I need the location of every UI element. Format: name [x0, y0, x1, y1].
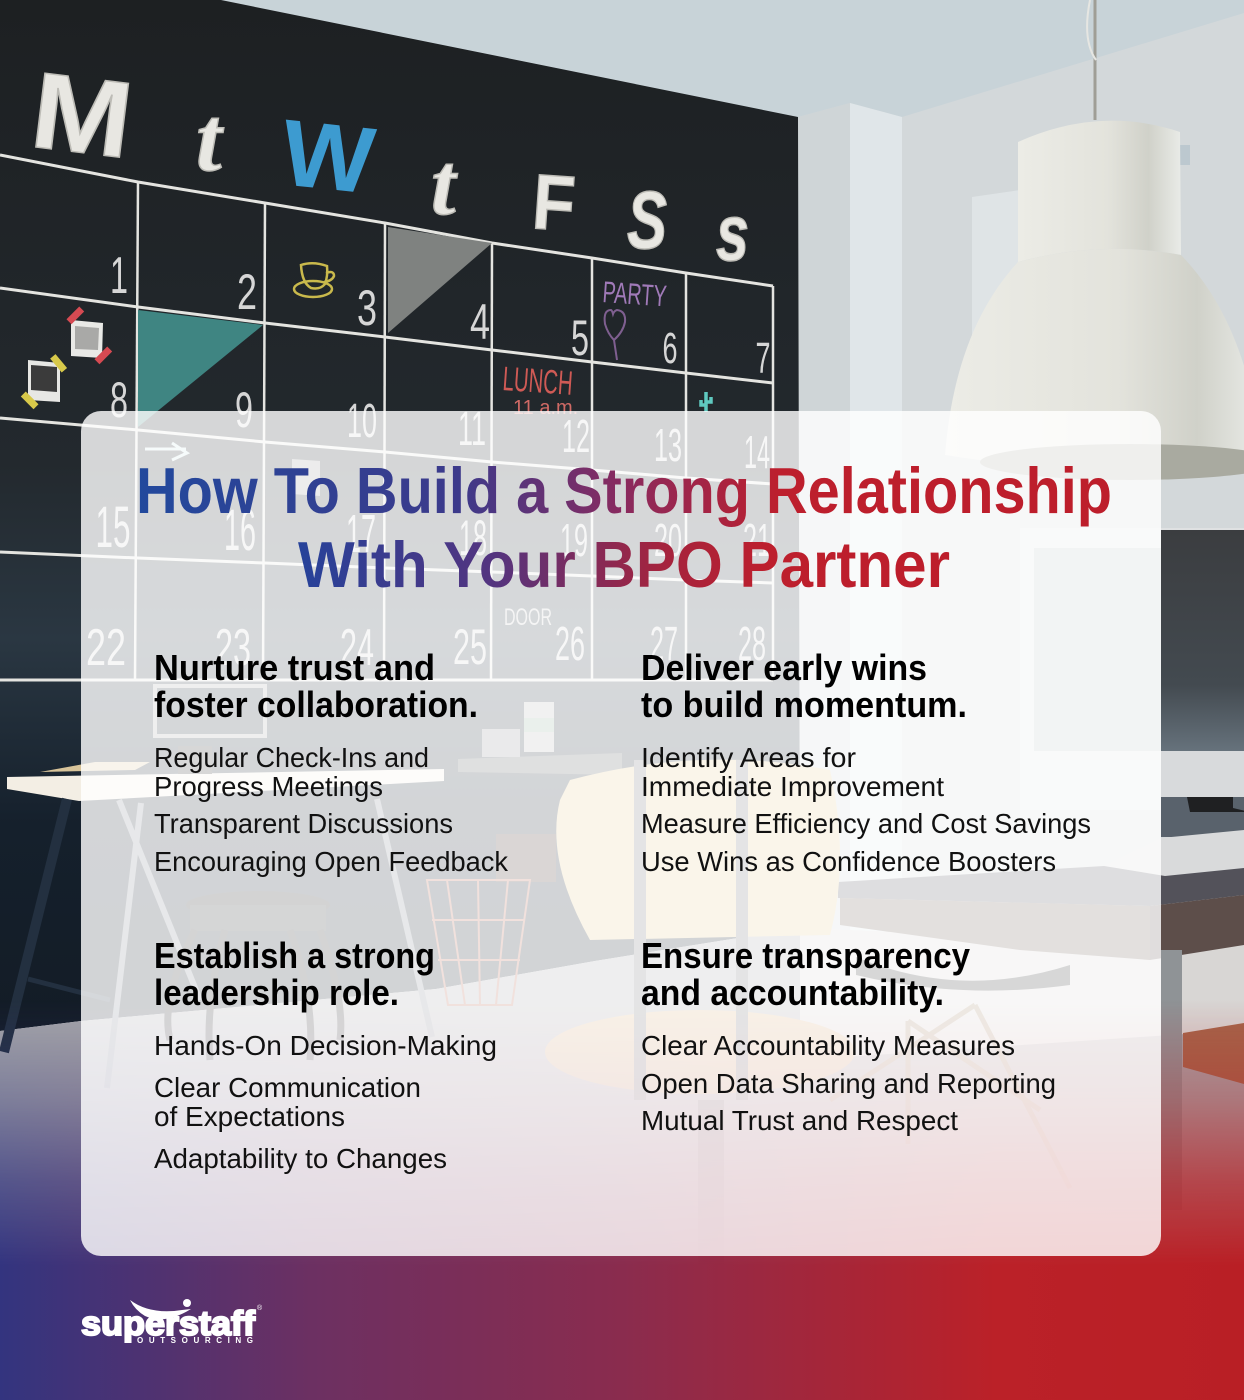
list: nurture trust items: Regular Check-Ins and	[154, 742, 429, 773]
list: early wins items: Use Wins as Confidence Boosters	[641, 846, 1056, 877]
heading: early wins	[641, 647, 967, 725]
chalk text: open door: DOOR	[504, 604, 552, 631]
list: early wins items	[641, 742, 1091, 877]
heading: nurture trust: Nurture trust and	[154, 647, 435, 688]
list: nurture trust items: Encouraging Open Feedback	[154, 846, 509, 877]
heading: early wins: to build momentum.	[641, 684, 967, 725]
section: early wins	[641, 647, 1091, 877]
logo tagline: OUTSOURCING	[137, 1336, 253, 1345]
logo wordmark: superstaff	[81, 1305, 256, 1343]
logo swoosh and figure	[130, 1299, 191, 1319]
chalk triangle: teal	[138, 310, 263, 427]
calendar day numbers: 10	[347, 395, 377, 448]
monitor	[1020, 528, 1244, 876]
list: early wins items: Immediate Improvement	[641, 771, 944, 802]
calendar day numbers: 27	[650, 618, 678, 671]
list: transparency items: Clear Accountability Measures	[641, 1030, 1015, 1061]
heading: nurture trust: foster collaboration.	[154, 684, 478, 725]
calendar day numbers: 5	[571, 310, 589, 366]
right wall base	[800, 928, 1244, 1060]
calendar day numbers: 2	[237, 264, 257, 320]
calendar weekday letters: s	[716, 188, 749, 277]
list: leadership items: Hands-On Decision-Making	[154, 1030, 497, 1061]
heading: leadership role	[154, 935, 435, 1013]
heading: nurture trust	[154, 647, 478, 725]
calendar day numbers: 17	[346, 504, 376, 564]
chalk grid lines	[0, 155, 773, 680]
wooden chair	[545, 760, 855, 1290]
chalk drawing: arrow	[145, 443, 187, 460]
list: transparency items: Mutual Trust and Respect	[641, 1105, 958, 1136]
list: leadership items: of Expectations	[154, 1101, 345, 1132]
chalk drawing: balloons	[605, 310, 625, 360]
calendar day numbers: 21	[743, 514, 771, 566]
calendar day numbers: 3	[357, 280, 377, 336]
section: leadership role	[154, 935, 497, 1174]
left desk	[4, 746, 444, 1088]
white walls and column	[798, 13, 1244, 1100]
list: leadership items: Clear Communication	[154, 1072, 421, 1103]
calendar day numbers: 20	[654, 514, 682, 566]
heading: leadership role: Establish a strong	[154, 935, 435, 976]
laptop and plants on back desk	[155, 686, 622, 882]
calendar weekday letters: W	[277, 99, 380, 214]
chalk text: lunch: LUNCH	[501, 360, 574, 403]
calendar day numbers: 19	[560, 514, 588, 566]
metal stool	[168, 891, 341, 1060]
pinned photos	[21, 307, 320, 496]
wire basket	[427, 880, 530, 1005]
title: With Your BPO Partner	[298, 528, 950, 601]
calendar weekday letters: t	[196, 88, 224, 190]
calendar day numbers: 11	[458, 403, 486, 456]
calendar day numbers: 28	[738, 618, 766, 671]
heading: early wins: Deliver early wins	[641, 647, 927, 688]
calendar day numbers: 18	[459, 510, 487, 566]
bottom colour gradient overlay	[0, 980, 1244, 1400]
pendant lamp	[945, 0, 1244, 480]
calendar weekday letters	[25, 49, 749, 277]
calendar day numbers: 13	[654, 419, 682, 471]
calendar day numbers: 1	[110, 247, 128, 305]
table leg and wood shelf	[1161, 950, 1244, 1210]
translucent content panel	[81, 411, 1161, 1256]
calendar day numbers: 9	[235, 382, 253, 438]
calendar day numbers: 24	[340, 619, 374, 677]
heading: transparency	[641, 935, 970, 1013]
calendar day numbers: 7	[756, 334, 770, 383]
floor	[0, 928, 1244, 1400]
heading: transparency: and accountability.	[641, 972, 944, 1013]
chalk drawing: coffee cup	[294, 263, 334, 297]
calendar day numbers: 6	[662, 324, 678, 373]
heading: transparency: Ensure transparency	[641, 935, 970, 976]
calendar day numbers: 12	[562, 410, 590, 462]
calendar day numbers: 14	[744, 426, 770, 478]
list: transparency items: Open Data Sharing and Reporting	[641, 1068, 1056, 1099]
list: leadership items	[154, 1030, 497, 1174]
calendar weekday letters: t	[431, 137, 458, 234]
calendar day numbers: 26	[555, 618, 585, 671]
list: nurture trust items: Progress Meetings	[154, 771, 383, 802]
eames chair	[830, 957, 1070, 1188]
calendar weekday letters: S	[627, 175, 667, 266]
calendar day numbers: 16	[224, 498, 256, 563]
list: early wins items: Identify Areas for	[641, 742, 856, 773]
calendar day numbers: 4	[470, 294, 490, 350]
chalkboard	[0, 0, 800, 1031]
chalk drawing: cactus	[701, 392, 711, 412]
chalk text: party: PARTY	[602, 276, 668, 313]
list: transparency items	[641, 1030, 1056, 1136]
ceiling	[0, 0, 1244, 200]
right desk	[838, 866, 1244, 960]
calendar day numbers: 25	[453, 619, 487, 675]
calendar day numbers: 8	[110, 372, 128, 428]
list: leadership items: Adaptability to Changes	[154, 1143, 447, 1174]
list: early wins items: Measure Efficiency and Cost Savings	[641, 808, 1091, 839]
chalk text: 11 am: 11 a.m.	[513, 397, 578, 419]
calendar day numbers: 23	[215, 619, 251, 677]
section: transparency	[641, 935, 1056, 1136]
section: nurture trust	[154, 647, 509, 877]
calendar weekday letters: F	[530, 157, 578, 248]
logo registered mark: ®	[257, 1304, 263, 1312]
list: nurture trust items	[154, 742, 509, 877]
title: How To Build a Strong Relationship	[136, 454, 1112, 527]
heading: leadership role: leadership role.	[154, 972, 399, 1013]
title	[136, 454, 1112, 601]
calendar day numbers: 15	[96, 495, 130, 560]
list: nurture trust items: Transparent Discussions	[154, 808, 453, 839]
calendar day numbers	[86, 247, 771, 677]
chalk triangle: grey	[388, 227, 492, 333]
calendar weekday letters: M	[25, 49, 139, 181]
calendar day numbers: 22	[86, 619, 126, 677]
logo: superstaff outsourcing	[81, 1299, 263, 1345]
